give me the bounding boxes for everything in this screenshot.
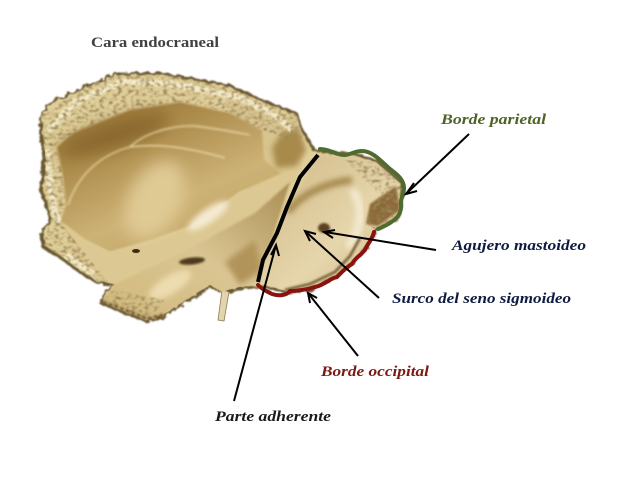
internal auditory meatus [179, 256, 205, 266]
label: Parte adherente: Parte adherente [215, 409, 331, 425]
bottom edge dark [103, 302, 163, 319]
vascular grooves [68, 126, 250, 205]
fossa shade [56, 105, 174, 165]
upper lobe [226, 102, 296, 172]
fossa light relief [120, 154, 190, 242]
mastoid rough dark area [366, 186, 400, 226]
rim rough light band [47, 82, 292, 275]
bone body [41, 75, 401, 320]
lower petrous plate [102, 182, 290, 320]
label: Borde parietal: Borde parietal [440, 112, 547, 128]
arrow: Borde occipital [308, 293, 358, 356]
line: Parte adherente boundary [258, 155, 318, 282]
concave squamous fossa [57, 102, 283, 252]
label: Surco del seno sigmoideo: Surco del seno sigmoideo [392, 291, 571, 307]
ridge highlight [185, 198, 230, 234]
border line: Borde parietal (green) [320, 149, 404, 229]
label: Agujero mastoideo: Agujero mastoideo [451, 238, 586, 254]
arrow: Borde parietal [406, 134, 469, 194]
mastoid region [258, 155, 400, 291]
rim speckle texture [40, 73, 304, 285]
styloid process [218, 290, 229, 321]
arrow: Surco del seno sigmoideo [305, 231, 379, 298]
interior painted layers [40, 73, 402, 322]
border line: Borde occipital (red) [258, 232, 374, 295]
petrous ridge [63, 174, 295, 284]
right plate shadow [225, 240, 262, 285]
upper hollow shadow [272, 128, 306, 168]
mastoid light crest [348, 190, 360, 248]
bone silhouette shadow [40, 73, 403, 322]
mastoid foramen [318, 223, 330, 233]
heading: Cara endocraneal: Cara endocraneal [91, 35, 219, 51]
plate highlight [148, 268, 192, 302]
arrow: Agujero mastoideo [324, 230, 436, 250]
mastoid edge brown [285, 238, 360, 290]
lower edge speckle [102, 291, 164, 318]
small foramen [132, 249, 140, 253]
arrow: Parte adherente [234, 245, 279, 401]
mastoid speckle [345, 160, 402, 230]
sigmoid shading [288, 180, 352, 212]
illustration: temporal bone, endocranial face [40, 73, 403, 322]
label: Borde occipital: Borde occipital [320, 364, 430, 380]
